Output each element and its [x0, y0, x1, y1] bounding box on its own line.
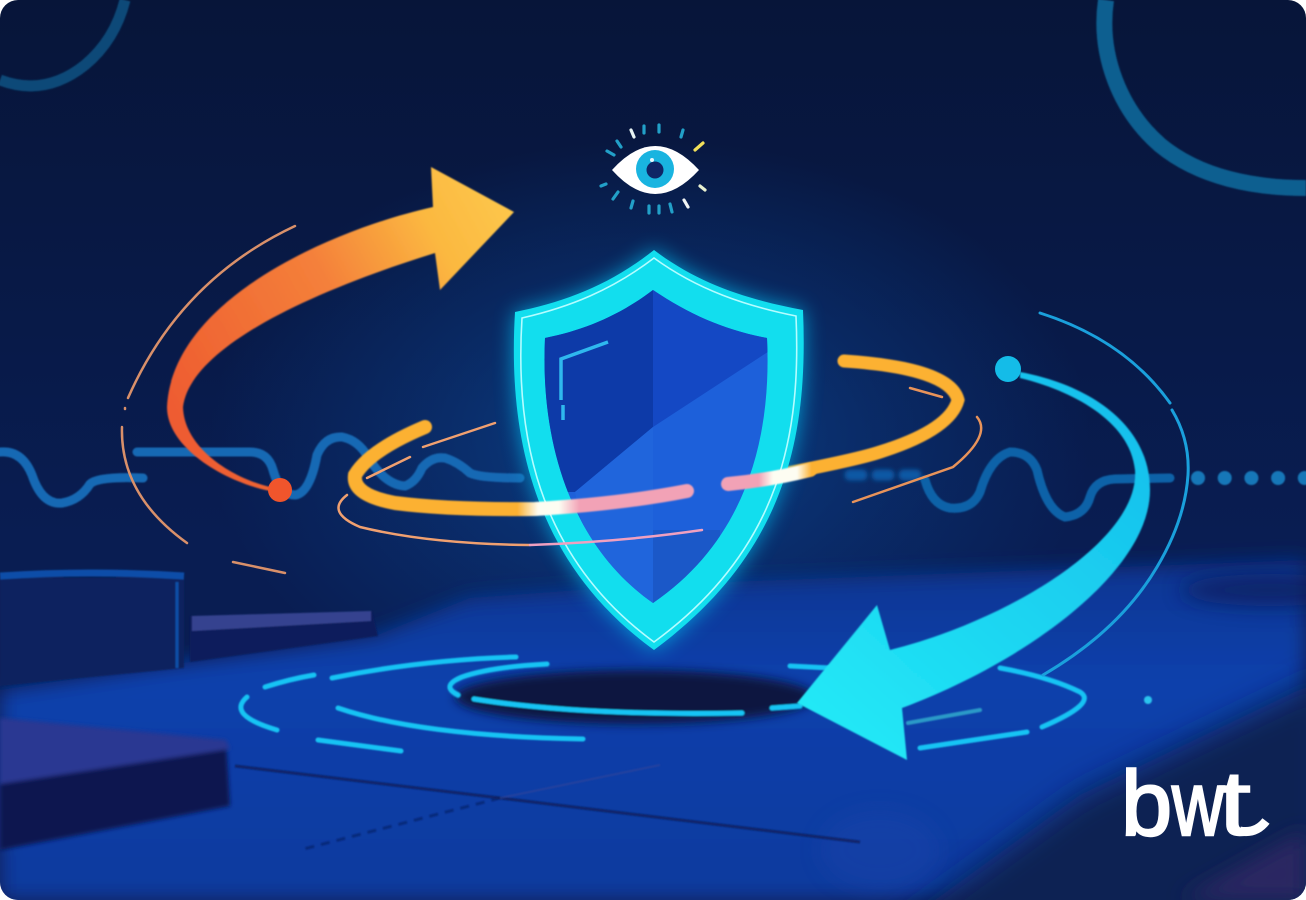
floor cracks	[235, 765, 860, 850]
decorative ring top right	[1104, 0, 1306, 188]
wave dots right	[1198, 471, 1306, 485]
logo: bwt: w	[1171, 752, 1224, 855]
floor far dark band	[1180, 574, 1306, 606]
logo: bwt: t	[1218, 751, 1251, 855]
wave dashes near shield	[850, 470, 925, 480]
thin cyan arc right	[1040, 313, 1188, 675]
background glow	[280, 180, 1020, 614]
thin orbit across shield	[530, 530, 702, 545]
floor spark	[1144, 696, 1152, 704]
floor rings	[241, 657, 1084, 751]
floor corner tint	[1192, 831, 1306, 900]
back orbit orange	[788, 353, 966, 476]
logo: bwt	[1126, 767, 1270, 838]
front orbit left	[355, 427, 687, 509]
left block bottom	[0, 718, 230, 850]
thin orange arc left	[122, 226, 295, 573]
floor	[0, 560, 1306, 900]
wave line left	[0, 437, 520, 503]
cyan arrow	[797, 356, 1150, 760]
orange arrow	[167, 167, 514, 502]
decorative ring top left	[0, 0, 125, 86]
left block top	[0, 573, 378, 686]
floor light reflection	[820, 810, 940, 890]
front orbit right	[728, 470, 810, 484]
wave line right	[925, 452, 1170, 517]
shield	[514, 250, 804, 650]
thin orange orbit left	[339, 423, 530, 545]
thin orange orbit right	[853, 388, 981, 502]
floor shadow corner	[880, 675, 1306, 900]
icon: eye	[601, 125, 705, 213]
logo: bwt: b	[1121, 753, 1172, 855]
